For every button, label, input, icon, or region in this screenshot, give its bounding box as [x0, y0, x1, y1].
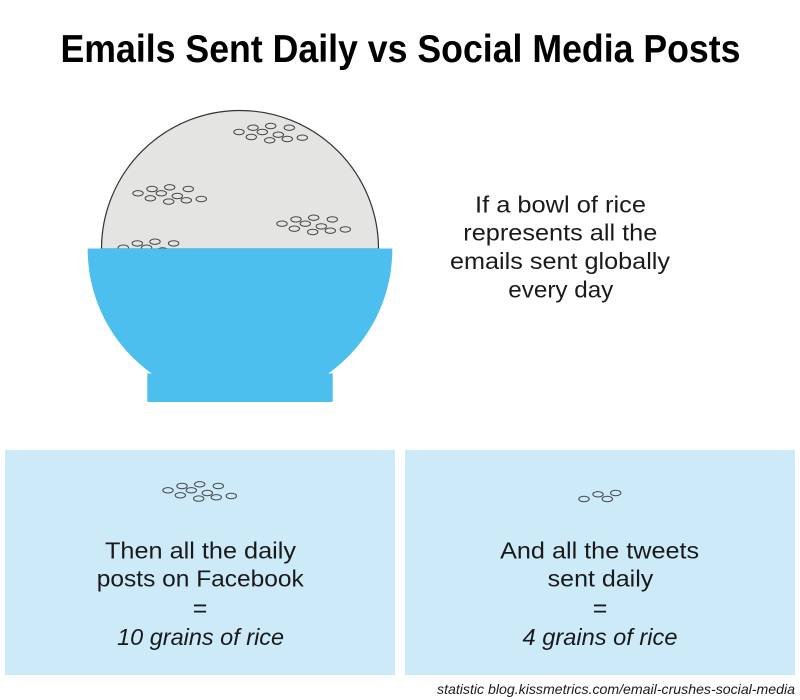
text: Facebook posts: 10 grains of rice [117, 624, 284, 650]
text: Facebook posts: = [193, 594, 207, 622]
text: Facebook posts [97, 537, 304, 650]
title: Emails Sent Daily vs Social Media Posts [60, 28, 740, 71]
text: bowl explanation: If a bowl of rice [475, 191, 646, 217]
text: bowl explanation [450, 191, 670, 303]
text: Facebook posts: Then all the daily [105, 537, 296, 563]
text: Facebook posts: posts on Facebook [97, 566, 304, 592]
rice grain clusters [118, 123, 350, 259]
bowl body [88, 248, 392, 402]
rice mound [102, 110, 378, 249]
text: bowl explanation: represents all the [463, 219, 657, 245]
text: bowl explanation: every day [508, 277, 614, 303]
text: tweets [500, 537, 699, 650]
panel: Facebook [5, 450, 395, 675]
source credit: statistic blog.kissmetrics.com/email-crushes-social-media [437, 681, 795, 697]
panel: tweets [405, 450, 795, 675]
icon: bowl of rice [88, 110, 392, 402]
text: tweets: = [593, 594, 607, 622]
text: bowl explanation: emails sent globally [450, 248, 670, 274]
text: tweets: sent daily [548, 566, 654, 592]
text: tweets: And all the tweets [500, 537, 699, 563]
icon: 4 grains of rice [579, 490, 621, 502]
text: tweets: 4 grains of rice [522, 624, 678, 650]
icon: 10 grains of rice [163, 482, 236, 501]
